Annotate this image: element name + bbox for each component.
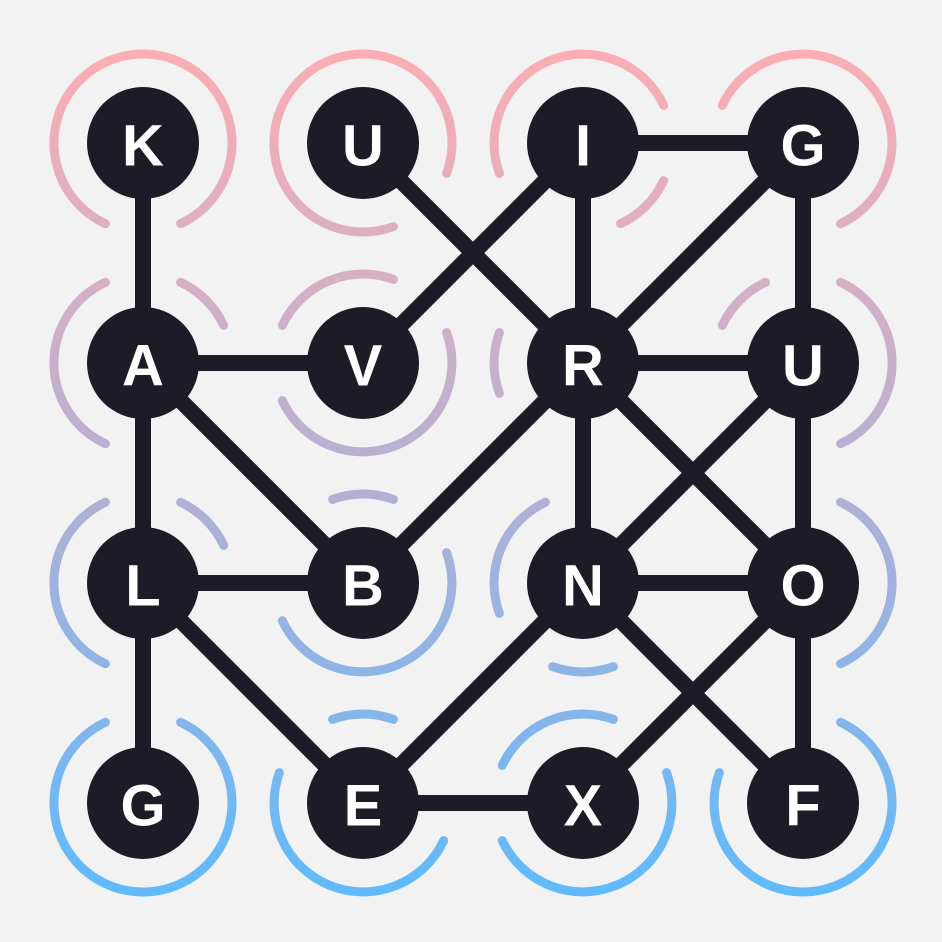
- node O: O: [780, 554, 826, 618]
- node K: [87, 87, 199, 199]
- node G2: [87, 747, 199, 859]
- node G2: G: [120, 774, 166, 838]
- node R: [527, 307, 639, 419]
- node U: [307, 87, 419, 199]
- node I: I: [575, 114, 591, 178]
- node R: R: [562, 334, 604, 398]
- node V: [307, 307, 419, 419]
- node F: F: [785, 774, 821, 838]
- node N: N: [562, 554, 604, 618]
- node L: [87, 527, 199, 639]
- node B: [307, 527, 419, 639]
- node F: [747, 747, 859, 859]
- node X: [527, 747, 639, 859]
- ring arcs around nodes: [54, 54, 892, 892]
- node I: [527, 87, 639, 199]
- node K: K: [122, 114, 164, 178]
- node B: B: [342, 554, 384, 618]
- node U: U: [342, 114, 384, 178]
- edges: [143, 143, 803, 803]
- node U2: U: [782, 334, 824, 398]
- node N: [527, 527, 639, 639]
- node V: V: [344, 334, 383, 398]
- node G: [747, 87, 859, 199]
- node E: [307, 747, 419, 859]
- node A: [87, 307, 199, 419]
- node U2: [747, 307, 859, 419]
- node X: X: [564, 774, 603, 838]
- node G: G: [780, 114, 826, 178]
- nodes: [87, 87, 859, 859]
- node E: E: [344, 774, 382, 838]
- node O: [747, 527, 859, 639]
- node A: A: [122, 334, 164, 398]
- node L: L: [125, 554, 161, 618]
